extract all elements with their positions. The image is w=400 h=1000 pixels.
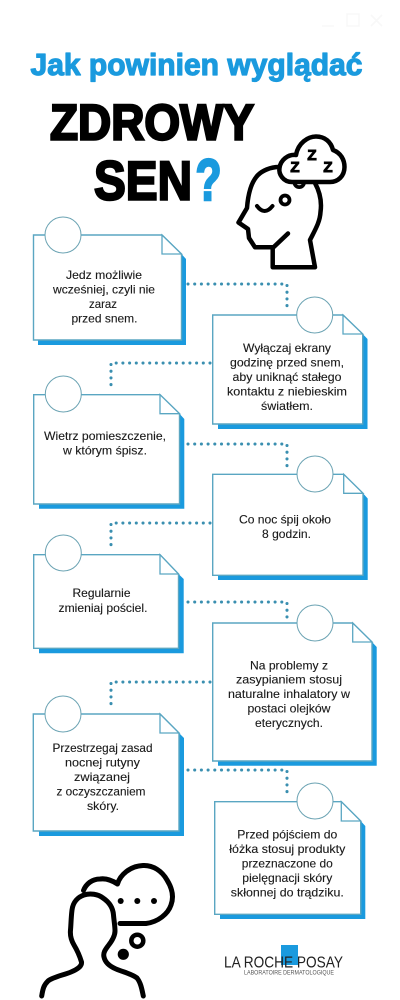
thought dots xyxy=(118,898,157,904)
card 4 text: 8 godzin. xyxy=(262,528,311,541)
icon: zzz letters: Z xyxy=(290,159,300,176)
speech cloud xyxy=(84,865,172,924)
card 2 text xyxy=(227,342,347,413)
card 8 text: Przed pójściem do xyxy=(237,828,337,842)
logo: La Roche-Posay: LA ROCHE POSAY xyxy=(224,954,343,971)
card 1 text: Jedz możliwie xyxy=(66,269,142,282)
card 8 text: skłonnej do trądziku. xyxy=(231,886,344,900)
card 1 text: zaraz xyxy=(89,298,117,311)
card 1 text: przed snem. xyxy=(72,312,138,326)
card 5 text: Regularnie xyxy=(72,587,130,600)
card 6 text xyxy=(228,660,351,730)
card 3 text: Wietrz pomieszczenie, xyxy=(44,430,166,443)
card 7 text: skóry. xyxy=(87,800,119,813)
panel: card 4 xyxy=(213,456,368,580)
card 6 text: postaci olejków xyxy=(248,702,331,716)
connector: card 5 to 6 xyxy=(188,602,287,623)
person silhouette xyxy=(42,894,143,996)
card 5 text: zmieniaj pościel. xyxy=(58,602,148,615)
card 6 text: zasypianiem stosuj xyxy=(236,674,342,686)
panel: card 8 xyxy=(215,783,365,919)
panel: card 6 xyxy=(213,605,377,766)
card 4 text xyxy=(239,514,331,541)
icon: zzz letters: Z xyxy=(307,147,317,164)
card 7 text: związanej xyxy=(74,771,130,784)
panel: card 3 xyxy=(34,376,184,509)
card 3 text: w którym śpisz. xyxy=(62,444,147,458)
card 1 text: wcześniej, czyli nie xyxy=(52,284,155,296)
icon: sleep cloud xyxy=(279,136,344,182)
title: question mark: ? xyxy=(196,148,222,213)
logo: La Roche-Posay xyxy=(224,945,343,976)
panel: card 1 xyxy=(34,217,186,345)
card 6 text: eterycznych. xyxy=(255,717,323,730)
card 1 text xyxy=(52,269,155,326)
card 4 text: Co noc śpij około xyxy=(239,514,331,526)
card 2 text: godzinę przed snem, xyxy=(230,356,344,370)
faint window controls xyxy=(322,14,382,26)
connector: card 2 to 3 xyxy=(111,363,210,390)
connector: card 4 to 5 xyxy=(111,523,210,549)
icon: zzz letters: Z xyxy=(323,159,333,176)
panel: card 7 xyxy=(33,696,184,836)
icon: sleeping head with cloud xyxy=(238,136,344,267)
connector: card 1 to 2 xyxy=(188,284,287,310)
thought bubble ring xyxy=(131,935,143,947)
card 8 text: pielęgnacji skóry xyxy=(242,872,333,885)
card 7 text: nocnej rutyny xyxy=(65,756,140,770)
card 6 text: Na problemy z xyxy=(250,660,328,672)
card 6 text: naturalne inhalatory w xyxy=(228,688,351,701)
card 8 text xyxy=(229,828,346,900)
card 2 text: Wyłączaj ekrany xyxy=(243,342,331,355)
title: line 1: Jak powinien wyglądać xyxy=(30,47,362,82)
panel: card 5 xyxy=(34,535,184,653)
title: ZDROWY: ZDROWY xyxy=(50,94,254,150)
title: SEN: SEN xyxy=(94,150,192,212)
connector: card 7 to 8 xyxy=(188,770,287,796)
card 2 text: światłem. xyxy=(261,400,313,413)
icon: zzz letters xyxy=(290,147,333,176)
panel: card 2 xyxy=(213,297,368,429)
card 2 text: kontaktu z niebieskim xyxy=(227,386,347,398)
card 2 text: aby uniknąć stałego xyxy=(232,371,342,384)
card 3 text xyxy=(44,430,166,458)
connector: card 6 to 7 xyxy=(111,682,210,708)
thought bubble dot xyxy=(118,949,129,960)
logo: La Roche-Posay: LABORATOIRE DERMATOLOGIQUE xyxy=(244,969,334,976)
card 7 text: z oczyszczaniem xyxy=(56,786,146,798)
connector: card 3 to 4 xyxy=(188,444,287,470)
card 7 text: Przestrzegaj zasad xyxy=(52,742,152,755)
icon: thinking person xyxy=(42,865,172,996)
card 7 text xyxy=(52,742,152,813)
card 8 text: łóżka stosuj produkty xyxy=(229,843,346,856)
card 8 text: przeznaczone do xyxy=(242,858,333,870)
card 5 text xyxy=(58,587,148,615)
